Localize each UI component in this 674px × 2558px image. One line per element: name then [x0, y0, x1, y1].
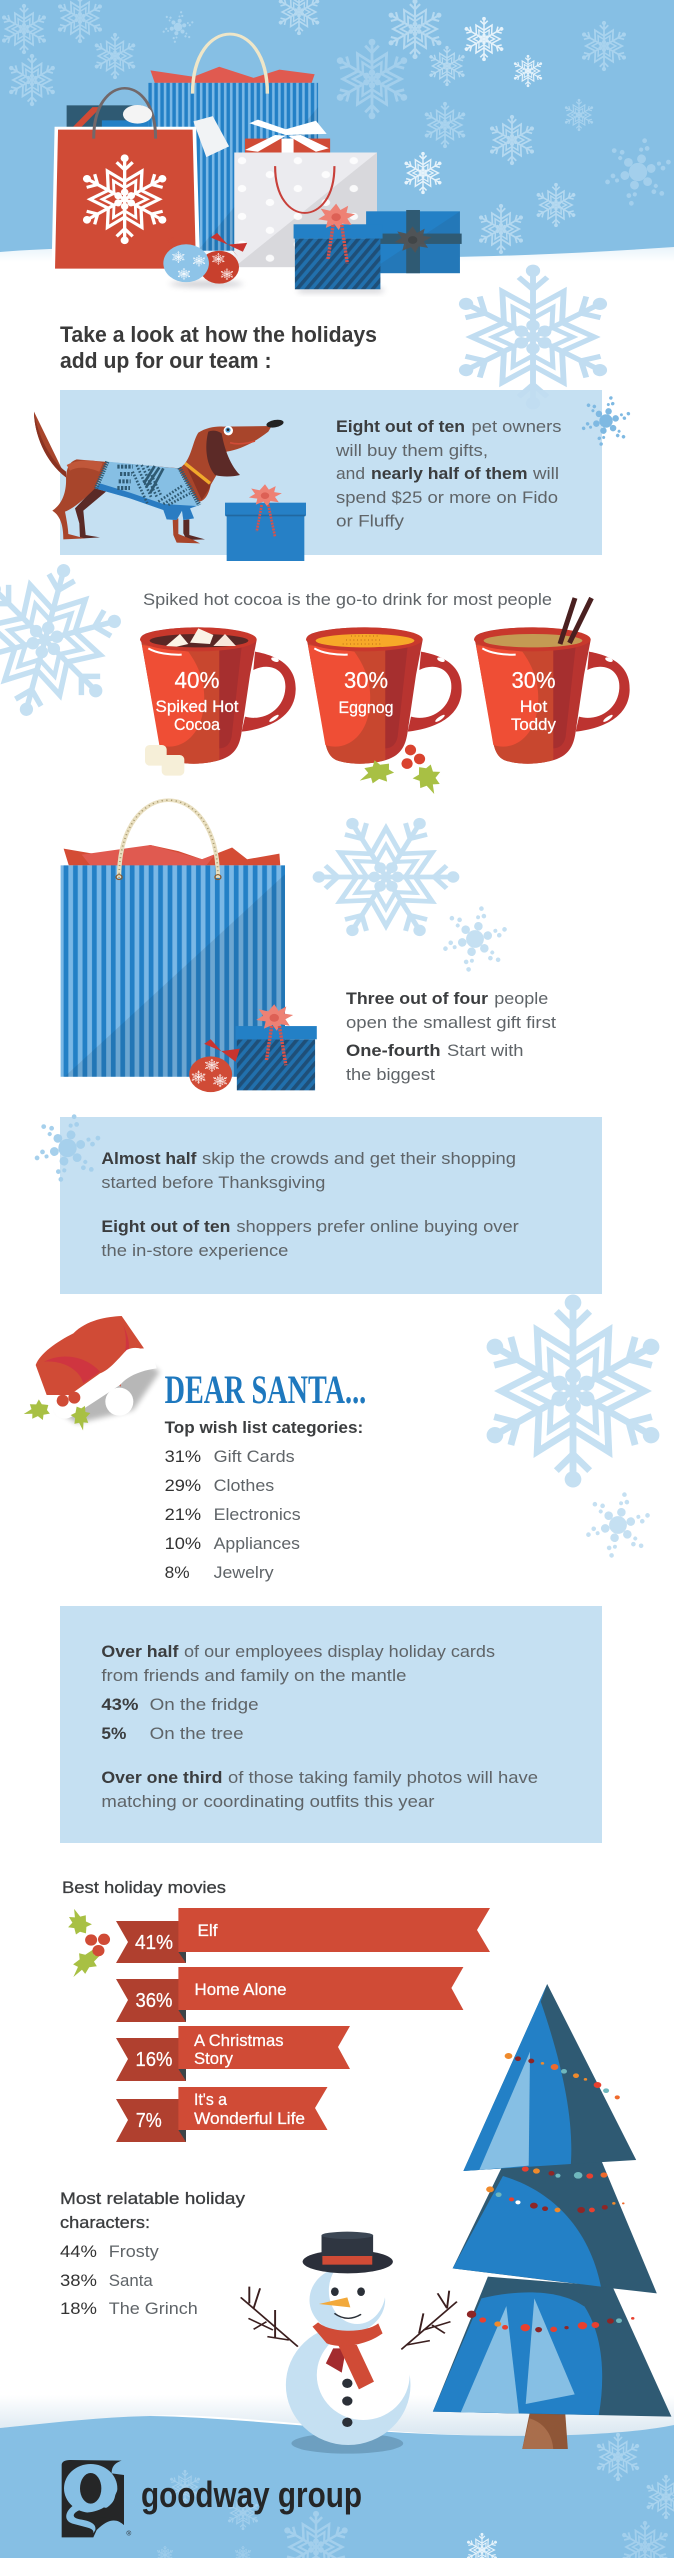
- dog in sweater: [34, 412, 284, 543]
- panel: holiday cards and photos: [60, 1606, 602, 1843]
- wish list: 21%: [165, 1505, 201, 1524]
- stick arms: [241, 2287, 457, 2350]
- wish list: Jewelry: [214, 1563, 274, 1582]
- mug: spiked hot cocoa: 40%: [174, 667, 220, 693]
- shopping text: Eight out of ten: [101, 1217, 230, 1236]
- chart: three mugs: [140, 598, 630, 798]
- illustration: shopping bags and gifts: [52, 34, 462, 293]
- pet stat text: [335, 417, 562, 530]
- snowflake right of wish list: [479, 1295, 667, 1487]
- gift opening text: Three out of four: [346, 989, 488, 1008]
- characters list: Santa: [109, 2271, 153, 2290]
- mug: hot toddy: 30%: [512, 667, 556, 693]
- characters list: Frosty: [109, 2242, 159, 2261]
- top tier: [463, 1984, 636, 2171]
- snowflake over panel: [453, 265, 613, 409]
- characters list: 44%: [60, 2242, 97, 2261]
- cards text: of those taking family photos will have: [228, 1768, 538, 1787]
- ribbon: It's a Wonderful Life 7%: 7%: [136, 2110, 162, 2132]
- gift opening text: open the smallest gift first: [346, 1013, 556, 1032]
- pet stat text: will buy them gifts,: [335, 441, 488, 460]
- cards text: On the tree: [150, 1724, 244, 1743]
- wish list: Electronics: [214, 1505, 301, 1524]
- ribbon: A Christmas Story 16%: A Christmas: [194, 2031, 284, 2050]
- back box behind red bag: [67, 105, 176, 127]
- footer snowflakes: [156, 2433, 674, 2558]
- ribbon: Home Alone 36%: [116, 1967, 463, 2022]
- logo mark: [62, 2460, 131, 2538]
- wish list: 8%: [165, 1563, 190, 1582]
- gift tag: [193, 116, 229, 157]
- gift and ornament: [189, 1004, 317, 1092]
- wish list: 29%: [165, 1476, 201, 1495]
- pet stat text: pet owners: [472, 417, 562, 436]
- snowman body: [286, 2257, 411, 2445]
- shopping text: Almost half: [101, 1149, 197, 1168]
- striped bag: [148, 34, 318, 251]
- wish list: Clothes: [214, 1476, 274, 1495]
- pet stat text: will: [532, 464, 559, 483]
- large striped bag with gift: [61, 800, 317, 1092]
- gift opening text: [346, 989, 556, 1084]
- cards text: 43%: [101, 1695, 138, 1714]
- mug: eggnog: [306, 627, 462, 764]
- snowman: [241, 2232, 457, 2454]
- gift opening text: the biggest: [346, 1065, 435, 1084]
- characters list: The Grinch: [109, 2299, 198, 2318]
- cards text: Over one third: [101, 1768, 222, 1787]
- ribbon: Elf 41%: [116, 1908, 490, 1963]
- cards text: matching or coordinating outfits this year: [101, 1792, 435, 1811]
- wish list: [165, 1418, 363, 1582]
- mug: spiked hot cocoa: [140, 627, 296, 776]
- dotted snowflake: [581, 396, 631, 446]
- dotted snowflake on panel edge: [33, 1114, 102, 1182]
- pet stat text: nearly half of them: [371, 464, 528, 483]
- cards text: On the fridge: [150, 1695, 259, 1714]
- cards text: Over half: [101, 1642, 179, 1661]
- shopping text: the in-store experience: [101, 1241, 288, 1260]
- wish list: Appliances: [214, 1534, 300, 1553]
- christmas tree: [433, 1984, 671, 2449]
- hat: [303, 2232, 393, 2273]
- characters list: 18%: [60, 2299, 97, 2318]
- white polka dot bag: [234, 152, 377, 267]
- characters list: Most relatable holiday: [60, 2189, 246, 2208]
- logo mark: ®: [126, 2530, 131, 2538]
- red box with white bow: [245, 120, 330, 154]
- striped gift with pink bow: [294, 204, 383, 289]
- wish list: Gift Cards: [214, 1447, 295, 1466]
- mug: hot toddy: Toddy: [511, 715, 556, 734]
- cards text: [101, 1642, 538, 1811]
- buttons: [342, 2379, 352, 2427]
- holly at eggnog mug: [354, 745, 450, 798]
- ribbon: It's a Wonderful Life 7%: [116, 2087, 328, 2142]
- wish list: 31%: [165, 1447, 201, 1466]
- sky snowflakes: [0, 0, 672, 254]
- heading: add up for our team :: [60, 348, 272, 373]
- shopping text: skip the crowds and get their shopping: [202, 1149, 516, 1168]
- shopping text: [101, 1149, 519, 1260]
- ribbon: Home Alone 36%: Home Alone: [194, 1980, 286, 1999]
- holly beside movies: [60, 1906, 110, 1982]
- wish list: Top wish list categories:: [165, 1418, 363, 1437]
- mug: hot toddy: [474, 598, 630, 764]
- middle tier: [453, 2162, 657, 2293]
- dotted snowflake right of wish list: [585, 1492, 651, 1558]
- pet stat text: and: [336, 464, 365, 483]
- shopping text: started before Thanksgiving: [101, 1173, 325, 1192]
- characters list: [60, 2189, 246, 2318]
- tree trunk: [522, 2413, 568, 2449]
- snowflake beside bag: [289, 787, 483, 967]
- characters list: characters:: [60, 2213, 150, 2232]
- cards text: from friends and family on the mantle: [101, 1666, 406, 1685]
- panel: pet owners: [34, 265, 631, 561]
- dear santa heading: DEAR SANTA...: [165, 1367, 366, 1412]
- cards text: 5%: [101, 1724, 126, 1743]
- shopping text: shoppers prefer online buying over: [236, 1217, 519, 1236]
- mug: eggnog: 30%: [344, 667, 388, 693]
- santa hat with holly: [21, 1316, 160, 1433]
- mug: spiked hot cocoa: Spiked Hot: [156, 697, 239, 716]
- pet stat text: spend $25 or more on Fido: [336, 488, 558, 507]
- footer snow hill: [0, 2395, 674, 2558]
- ribbon: It's a Wonderful Life 7%: Wonderful Life: [194, 2109, 305, 2128]
- mug: hot toddy: Hot: [520, 697, 548, 716]
- gift and ornament shadows: [170, 280, 383, 293]
- ribbon: Elf 41%: Elf: [198, 1921, 218, 1940]
- face: [319, 2287, 365, 2318]
- panel: shopping habits: [33, 1114, 602, 1294]
- header sky with snow hill: [0, 0, 674, 290]
- white bag border and red bag: [52, 88, 200, 269]
- bottom tier: [433, 2277, 671, 2417]
- gift under dog: [225, 484, 306, 561]
- ribbon: A Christmas Story 16%: 16%: [136, 2049, 173, 2071]
- blue gift with dark ribbon: [366, 210, 462, 273]
- gift opening text: One-fourth: [346, 1041, 441, 1060]
- dotted snowflake beside bag: [442, 906, 508, 972]
- characters list: 38%: [60, 2271, 97, 2290]
- chart: movie ribbons: [116, 1908, 490, 2142]
- ribbon: A Christmas Story 16%: Story: [194, 2049, 233, 2068]
- ornaments: [163, 233, 247, 284]
- mug: eggnog: Eggnog: [338, 698, 394, 717]
- wish list: 10%: [165, 1534, 201, 1553]
- ribbon: A Christmas Story 16%: [116, 2026, 350, 2081]
- ribbon: Elf 41%: 41%: [135, 1932, 173, 1954]
- logo: [62, 2460, 362, 2538]
- drinks caption: Spiked hot cocoa is the go-to drink for most people: [143, 590, 552, 609]
- ribbon: It's a Wonderful Life 7%: It's a: [194, 2090, 228, 2109]
- mug: spiked hot cocoa: Cocoa: [174, 715, 221, 734]
- pet stat text: Eight out of ten: [336, 417, 465, 436]
- cards text: of our employees display holiday cards: [184, 1642, 495, 1661]
- gift opening text: people: [494, 989, 548, 1008]
- string lights: [467, 2053, 634, 2332]
- ribbon: Home Alone 36%: 36%: [136, 1990, 173, 2012]
- logo wordmark: goodway group: [141, 2474, 362, 2515]
- heading: Take a look at how the holidays: [60, 322, 377, 347]
- heading: [60, 322, 377, 373]
- gift opening text: Start with: [447, 1041, 524, 1060]
- snowflake left of mugs: [0, 545, 137, 735]
- movies heading: Best holiday movies: [62, 1878, 226, 1897]
- scarf: [313, 2322, 383, 2389]
- pet stat text: or Fluffy: [336, 512, 405, 530]
